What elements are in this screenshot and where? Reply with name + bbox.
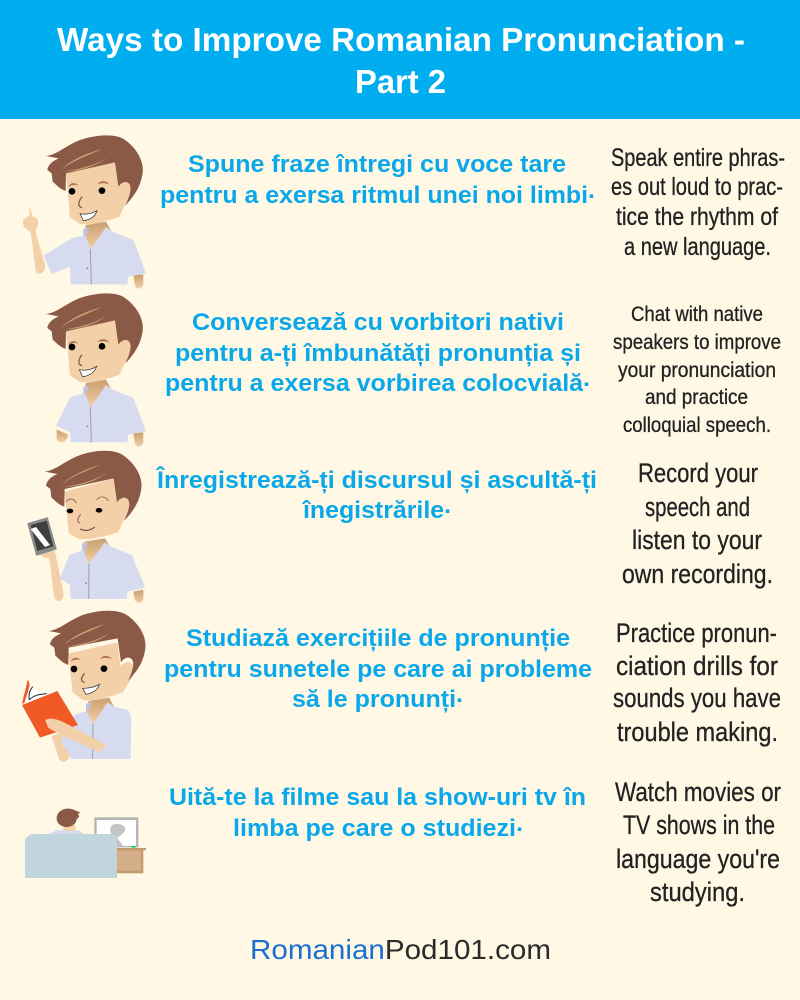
text: English sentence 4	[613, 618, 781, 747]
text: English sentence 2: speakers to improve	[613, 331, 781, 354]
text: English sentence 3: listen to your	[632, 525, 762, 555]
title: Ways to Improve Romanian Pronunciation -	[57, 21, 745, 58]
icon: man pointing finger	[23, 135, 146, 289]
title	[57, 21, 745, 100]
text: Romanian sentence 2	[165, 309, 590, 397]
text: English sentence 2: Chat with native	[631, 303, 763, 326]
icon: man with phone	[28, 451, 145, 603]
text: Romanian sentence 4: Studiază exercițiile de pronunție	[186, 625, 570, 652]
text: Romanian sentence 4: să le pronunți	[292, 686, 449, 713]
icon: person on sofa watching TV	[25, 809, 146, 878]
text: Romanian sentence 5: Uită-te la filme sau la show-uri tv în	[169, 784, 586, 811]
text: English sentence 3	[622, 458, 773, 589]
text: Romanian sentence 2: pentru a-ți îmbunătăți pronunția și	[175, 340, 581, 367]
title: Part 2	[355, 63, 446, 100]
text: Romanian sentence 5: .	[516, 810, 523, 837]
text: Romanian sentence 5	[169, 784, 586, 842]
text: Romanian sentence 5: limba pe care o studiezi	[233, 815, 504, 842]
text: Romanian sentence 1	[160, 151, 595, 209]
text: Romanian sentence 1: pentru a exersa ritmul unei noi limbi	[160, 182, 572, 209]
footer logo text: Romanian Pod101.com	[250, 934, 551, 965]
text: Romanian sentence 3: înegistrările	[303, 497, 439, 524]
header banner	[0, 0, 800, 119]
text: English sentence 3: own recording.	[622, 559, 773, 589]
text: Romanian sentence 2: .	[583, 365, 590, 392]
text: English sentence 2: your pronunciation	[618, 359, 776, 382]
text: Romanian sentence 3	[156, 466, 597, 524]
text: English sentence 5	[615, 777, 781, 907]
text: English sentence 2: colloquial speech.	[623, 414, 771, 437]
text: Romanian sentence 4	[164, 625, 592, 713]
text: Romanian sentence 2: pentru a exersa vorbirea colocvială	[165, 370, 567, 397]
text: Romanian sentence 4: .	[456, 681, 463, 708]
icon: man reading book	[22, 611, 145, 762]
text: English sentence 4: trouble making.	[617, 717, 778, 747]
text: English sentence 2: and practice	[645, 386, 748, 409]
icon: man smiling	[46, 293, 146, 447]
text: English sentence 5: studying.	[650, 877, 745, 907]
text: Romanian sentence 1: Spune fraze întregi cu voce tare	[188, 151, 566, 178]
text: English sentence 4: ciation drills for	[616, 651, 778, 681]
text: Romanian sentence 4: pentru sunetele pe care ai probleme	[164, 656, 592, 683]
text: Romanian sentence 1: .	[588, 177, 595, 204]
text: Romanian sentence 3: Înregistrează-ți discursul și ascultă-ți	[156, 466, 597, 494]
text: English sentence 1	[611, 144, 785, 261]
text: English sentence 3: Record your	[638, 458, 758, 488]
text: English sentence 3: speech and	[645, 492, 750, 522]
text: Romanian sentence 2: Conversează cu vorbitori nativi	[192, 309, 564, 336]
text: Romanian sentence 3: .	[444, 492, 451, 519]
text: English sentence 2	[613, 303, 781, 437]
